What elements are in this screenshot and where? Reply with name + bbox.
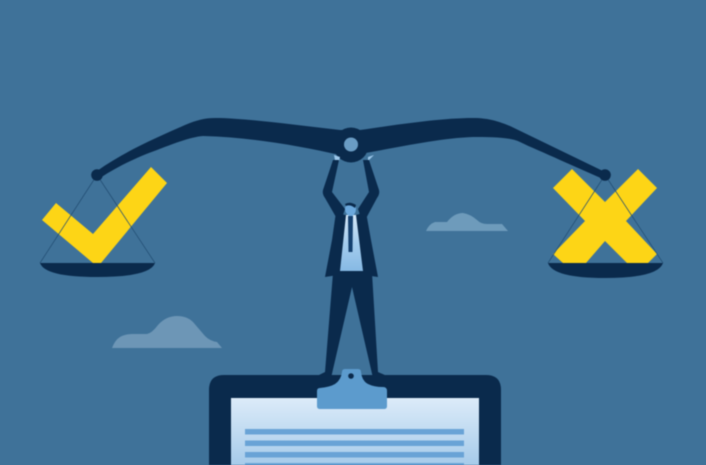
businessman figure: [317, 155, 387, 378]
clipboard: [209, 369, 501, 465]
icon: yellow check mark: [42, 167, 167, 263]
shirt: [340, 215, 363, 271]
icon: yellow cross mark: [553, 169, 657, 263]
clipboard clip: [317, 369, 387, 409]
text lines on paper: [245, 429, 464, 465]
beam pivot ring: [334, 128, 368, 162]
arms: [323, 160, 345, 224]
hair: [345, 203, 356, 208]
jacket: [325, 212, 378, 277]
hands: [334, 155, 374, 161]
left scale pan with strings: [40, 175, 155, 277]
cloud: lower left: [112, 316, 222, 348]
legs: [317, 273, 387, 378]
cloud: right of figure: [426, 213, 508, 231]
paper sheet: [231, 398, 479, 465]
tie: [348, 216, 353, 252]
head: [345, 204, 356, 217]
right scale pan with strings: [548, 175, 663, 278]
scale beam: [91, 118, 611, 181]
